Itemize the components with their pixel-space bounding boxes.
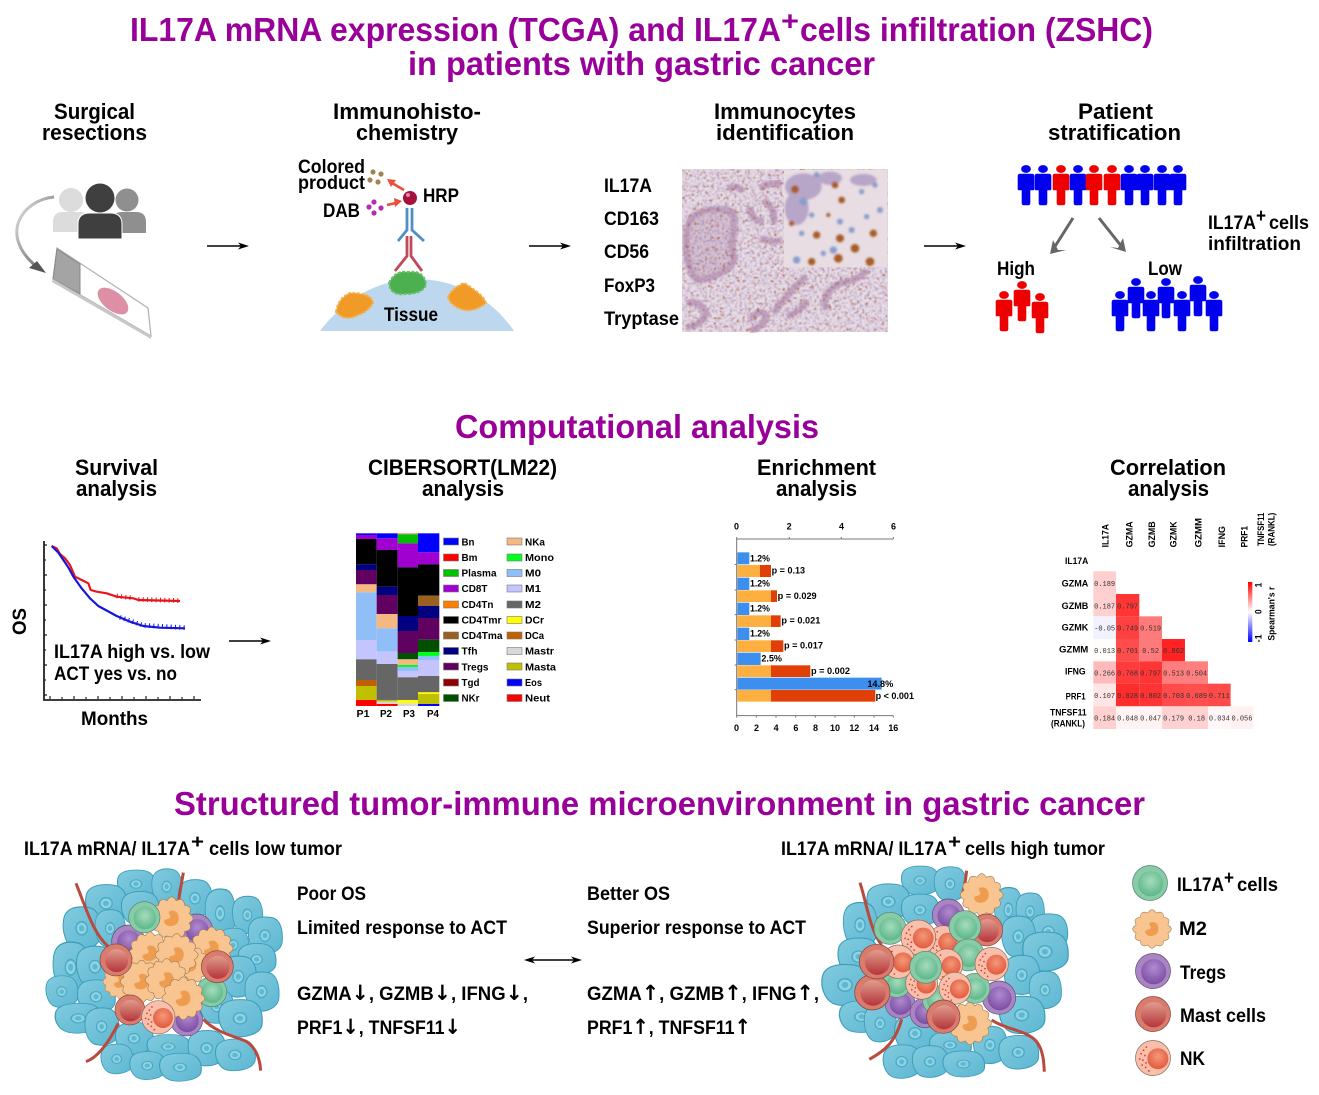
heatmap values: 0.797 [1140,671,1161,679]
chart: enrichment bars [734,521,914,733]
row labels: PRF1 [1066,691,1086,701]
legend: cell types: Mastr [525,646,554,658]
row labels: IL17A [1065,556,1089,566]
heatmap values: 0.189 [1094,581,1115,589]
heatmap values: 0.828 [1117,693,1138,701]
chart: survival curves [44,541,201,700]
icon: tissue antigens [336,272,486,318]
heading: patient stratification: stratification [1048,120,1181,145]
labels: Colored [298,157,365,178]
chart annotation [54,642,210,685]
heading: structured tumor-immune microenvironment: Structured tumor-immune microenvironment in gastric cancer [174,785,1145,822]
panel: low tumor [24,832,343,1081]
chart: enrichment bars: 2.5% [761,654,783,664]
heading: CIBERSORT analysis: analysis [422,476,504,501]
arrows: split to high and low [1050,218,1126,254]
panel: CIBERSORT analysis [356,455,557,720]
legend: cell types [444,536,556,704]
legend item: NK: NK [1180,1049,1205,1070]
chart: enrichment bars: p = 0.017 [784,641,823,651]
panel: immunocytes identification [604,99,888,332]
heatmap values: 0.107 [1094,693,1115,701]
legend item: IL17A+ cells [1132,866,1278,900]
heatmap values: 0.504 [1186,671,1207,679]
legend: cell types: DCr [525,614,544,626]
title: + [781,6,799,36]
row labels: IFNG [1065,666,1086,676]
legend: cell types: CD4Tmr [462,614,502,626]
heading: immunohistochemistry: Immunohisto- [333,99,481,124]
legend: cell types: NKr [462,692,480,704]
heading: high tumor: IL17A mRNA/ IL17A [781,839,947,860]
label: infiltration: cells [1269,213,1309,234]
heading: survival analysis: Survival [75,455,158,480]
heading: immunohistochemistry [333,99,481,145]
heading: survival analysis [75,455,158,501]
marker list [604,176,679,330]
heading: CIBERSORT analysis: CIBERSORT(LM22) [368,455,557,480]
heading: immunohistochemistry: chemistry [356,120,459,145]
legend: cell types: Tregs [462,662,489,674]
heading: survival analysis: analysis [76,476,157,501]
legend: cell types: Mono [525,552,554,564]
legend item: IL17A+ cells: cells [1237,875,1278,896]
chart labels: patients: P2 [380,708,392,720]
heatmap cells [1093,571,1254,729]
color scale: 1 [1254,583,1264,587]
legend item: M2: M2 [1179,919,1207,940]
row labels: GZMM [1059,645,1089,655]
group: high: High [997,259,1035,280]
arrow: double-headed [524,956,582,964]
title [130,6,1153,82]
legend item: M2 [1133,910,1207,948]
heading: high tumor: + [948,832,961,853]
chart annotation: IL17A high vs. low [54,642,210,663]
column labels: GZMK [1169,521,1179,547]
chart: enrichment bars: 14.8% [867,679,894,689]
heading: immunocytes identification: Immunocytes [714,99,856,124]
heading: low tumor [24,832,343,860]
labels: DAB [323,201,360,222]
title: in patients with gastric cancer [408,45,875,82]
legend: immune cells [1132,866,1278,1076]
panel: high tumor [781,832,1106,1078]
bar: P3 [398,533,418,706]
panel: correlation analysis [1050,455,1277,729]
legend item: NK [1136,1040,1205,1076]
heading: low tumor: IL17A mRNA/ IL17A [24,839,190,860]
panel: surgical resections [17,99,151,339]
color scale [1248,582,1277,642]
heading: patient stratification [1048,99,1181,145]
diagram: high tumor microenvironment [822,866,1068,1078]
heatmap values: 0.689 [1186,693,1207,701]
text: low tumor outcomes [297,884,528,1039]
chart: enrichment bars: 4 [839,521,845,531]
legend item: IL17A+ cells: + [1224,868,1234,889]
heatmap values: 0.862 [1163,648,1184,656]
icon: antibodies [395,208,424,271]
text: high tumor outcomes: PRF1↑, TNFSF11↑ [587,1015,751,1039]
heatmap values: 0.768 [1117,671,1138,679]
column labels [1100,513,1276,547]
row labels: (RANKL) [1051,719,1085,729]
immune cells [855,874,1016,1045]
label: infiltration [1208,206,1309,255]
column labels: TNFSF11 [1256,513,1266,546]
heatmap values: 0.013 [1094,648,1115,656]
chart: enrichment bars: 8 [813,723,818,733]
text: low tumor outcomes: PRF1↓, TNFSF11↓ [297,1015,461,1039]
heatmap values: -0.05 [1094,626,1115,634]
column labels: IFNG [1217,526,1227,547]
legend item: Mast cells [1136,996,1266,1032]
panel: patient stratification [996,99,1309,333]
chart: enrichment bars: 12 [849,723,859,733]
heatmap values: 0.703 [1163,693,1184,701]
heading: enrichment analysis: Enrichment [757,455,877,480]
heading: surgical resections: Surgical [54,99,135,124]
column labels: PRF1 [1239,526,1249,547]
heading: immunocytes identification: identification [716,120,854,145]
micrograph inset: high magnification [784,170,887,267]
chart: enrichment bars: 0 [734,723,739,733]
legend: cell types: CD4Tn [462,599,494,611]
heatmap values: 0.802 [1140,693,1161,701]
chart: enrichment bars: 14 [869,723,880,733]
chart annotation: ACT yes vs. no [54,664,177,685]
vessels [76,873,261,1071]
vessels [860,871,1044,1072]
row labels [1050,556,1089,729]
column labels: GZMB [1147,521,1157,547]
legend: cell types: CD8T [462,583,488,595]
legend: cell types: Bm [462,552,478,564]
heading: correlation analysis [1110,455,1226,501]
heatmap values: 0.034 [1209,716,1230,724]
legend item: IL17A+ cells: IL17A [1177,875,1224,896]
chart labels: patients [356,708,439,720]
legend item: Tregs [1136,954,1226,988]
color scale: 0 [1254,609,1264,614]
text: low tumor outcomes: Limited response to ACT [297,918,507,939]
heading: correlation analysis: analysis [1128,476,1209,501]
heatmap values: 0.048 [1117,716,1138,724]
heading: enrichment analysis [757,455,877,501]
icon: colored product and DAB dots [366,169,404,216]
color scale: Spearman's r [1267,586,1277,641]
micrograph: IHC staining [682,169,888,332]
icon: HRP enzyme [403,191,417,205]
heatmap values: 0.266 [1094,671,1115,679]
chart: enrichment bars: 2 [754,723,759,733]
panel: immunohistochemistry [298,99,514,331]
chart: enrichment bars: p = 0.13 [772,566,805,576]
heatmap values: 0.047 [1140,716,1161,724]
panel: enrichment analysis [734,455,914,733]
tumor cells [46,869,282,1081]
label: infiltration: IL17A [1208,213,1256,234]
row labels: TNFSF11 [1050,708,1087,718]
heatmap values: 0.749 [1117,626,1138,634]
legend: cell types: Tgd [462,677,480,689]
heatmap values [1094,581,1252,724]
legend: cell types: CD4Tma [462,630,503,642]
text: low tumor outcomes: Poor OS [297,884,366,905]
legend: cell types: Tfh [462,646,478,658]
chart labels: patients: P4 [427,708,439,720]
heatmap values: 0.184 [1094,716,1115,724]
marker list: Tryptase [604,309,679,330]
chart: enrichment bars: 1.2% [750,554,771,564]
diagram: low tumor microenvironment [46,869,282,1081]
legend: cell types: M2 [525,599,541,611]
legend: cell types: NKa [525,536,545,548]
legend: cell types: Masta [525,662,556,674]
icon: patients [53,184,146,239]
heatmap values: 0.187 [1094,603,1115,611]
column labels: (RANKL) [1266,513,1276,546]
heatmap values: 0.179 [1163,716,1184,724]
axis label: months: Months [81,709,148,730]
legend: cell types: Neut [525,692,551,704]
label: infiltration: infiltration [1208,234,1301,255]
column labels: IL17A [1100,524,1110,547]
heading: immunocytes identification [714,99,856,145]
chart: enrichment bars: p < 0.001 [876,691,914,701]
row labels: GZMA [1062,578,1089,588]
heatmap values: 0.711 [1209,693,1230,701]
legend item: Mast cells: Mast cells [1180,1006,1266,1027]
marker list: FoxP3 [604,276,655,297]
title: cells infiltration (ZSHC) [800,11,1153,48]
bar: P2 [377,533,398,706]
heatmap values: 0.056 [1231,716,1252,724]
chart: enrichment bars: p = 0.002 [811,666,850,676]
arrow [529,242,571,250]
chart labels: patients: P3 [403,708,415,720]
legend: cell types: Bn [462,536,474,548]
arrow [924,242,966,250]
marker list: CD163 [604,209,659,230]
chart labels: patients: P1 [356,708,370,720]
chart: enrichment bars: 0 [734,521,739,531]
marker list: IL17A [604,176,652,197]
heatmap values: 0.513 [1163,671,1184,679]
text: low tumor outcomes: GZMA↓, GZMB↓, IFNG↓, [297,981,528,1005]
chart: enrichment bars: 10 [830,723,840,733]
text: high tumor outcomes: GZMA↑, GZMB↑, IFNG↑, [587,981,819,1005]
label: infiltration: + [1256,206,1266,227]
chart: enrichment bars: 6 [793,723,798,733]
heading: enrichment analysis: analysis [776,476,857,501]
arrow: patient to slide [17,197,54,273]
heatmap values: 0.519 [1140,626,1161,634]
group: low [1112,259,1222,331]
chart: enrichment bars: 4 [774,723,779,733]
arrow [207,242,249,250]
chart: enrichment bars: 6 [891,521,896,531]
heading: computational analysis: Computational analysis [455,408,819,445]
legend: cell types: M0 [525,568,541,580]
chart: enrichment bars: 16 [888,723,898,733]
color scale: -1 [1254,634,1264,642]
chart: stacked bars [356,533,439,706]
heading: high tumor [781,832,1106,860]
row labels: GZMB [1062,601,1089,611]
arrow [229,638,271,644]
marker list: CD56 [604,242,649,263]
labels [298,157,459,326]
diagram: tissue dome [320,279,514,331]
bar: P4 [418,533,439,706]
heading: correlation analysis: Correlation [1110,455,1226,480]
heatmap values: 0.701 [1117,648,1138,656]
chart: correlation heatmap [1050,513,1277,729]
icon: patient row [1018,165,1186,205]
labels: Tissue [384,305,438,326]
heading: surgical resections [42,99,147,145]
immune cells [100,897,233,1036]
heading: CIBERSORT analysis [368,455,557,501]
text: high tumor outcomes: Superior response to ACT [587,918,806,939]
group: low: Low [1148,259,1182,280]
heatmap values: 0.797 [1117,603,1138,611]
panel: survival analysis [10,455,210,730]
icon: slide [52,248,151,339]
heatmap values: 0.18 [1188,716,1205,724]
labels: HRP [423,186,459,207]
heading: patient stratification: Patient [1078,99,1154,124]
row labels: GZMK [1062,623,1089,633]
tumor cells [822,866,1068,1078]
chart: enrichment bars: 1.2% [750,604,771,614]
heading: high tumor: cells high tumor [965,839,1106,860]
heading: surgical resections: resections [42,120,147,145]
chart: enrichment bars: 2 [787,521,792,531]
chart: enrichment bars: 1.2% [750,629,771,639]
heading: low tumor: cells low tumor [209,839,343,860]
chart: enrichment bars: p = 0.029 [778,591,817,601]
labels: product [298,173,366,194]
heading: low tumor: + [191,832,204,853]
chart: enrichment bars: p = 0.021 [781,616,820,626]
title: IL17A mRNA expression (TCGA) and IL17A [130,11,781,48]
axis label: OS: OS [10,608,31,635]
legend item: Tregs: Tregs [1180,963,1226,984]
legend: cell types: Plasma [462,568,497,580]
column labels: GZMM [1194,518,1204,547]
legend: cell types: M1 [525,583,541,595]
column labels: GZMA [1125,521,1135,547]
bar: P1 [356,533,377,706]
text: high tumor outcomes: Better OS [587,884,670,905]
legend: cell types: DCa [525,630,544,642]
chart: enrichment bars: 1.2% [750,579,771,589]
group: high [996,259,1048,333]
legend: cell types: Eos [525,677,542,689]
text: high tumor outcomes [587,884,819,1039]
heatmap values: 0.52 [1142,648,1159,656]
